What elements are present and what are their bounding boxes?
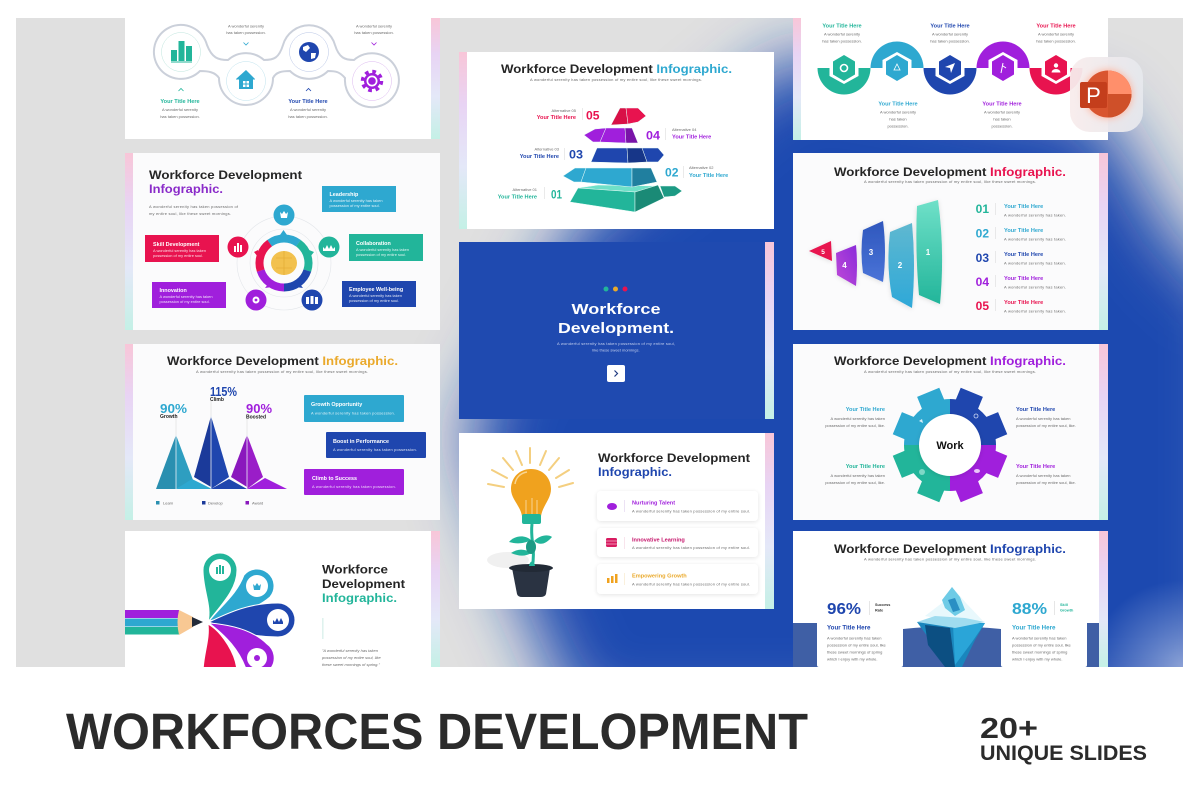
callout: Skill Development: Skill Development: [153, 242, 200, 248]
captions top: A wonderful serenity: [932, 32, 968, 36]
slide count: [980, 713, 1147, 765]
card: Empowering Growth: A wonderful serenity has taken possession of my entire soul.: [632, 582, 750, 586]
labels right: A wonderful serenity has taken: [1016, 416, 1070, 421]
quote: possession of my entire soul, like: [321, 655, 381, 660]
list: 01: [976, 202, 989, 216]
quote: "A wonderful serenity has taken: [322, 648, 379, 653]
captions bottom: Your Title Here: [878, 102, 918, 108]
slide: pyramid: [459, 52, 774, 229]
tier labels: Alternative 02: [689, 165, 714, 170]
captions top: Your Title Here: [930, 24, 970, 30]
list: Your Title Here: [1004, 252, 1043, 258]
labels left: Your Title Here: [846, 464, 885, 470]
stat card: 96%: which I enjoy with my whole.: [827, 656, 877, 662]
heading: [558, 301, 674, 337]
card: Nurturing Talent: A wonderful serenity has taken possession of my entire soul.: [632, 508, 750, 514]
callout: Employee Well-being: Employee Well-being: [349, 287, 403, 293]
tier labels: Alternative 05: [552, 108, 577, 113]
callout: Leadership: [322, 186, 396, 212]
diagram: rings and segments: [237, 216, 331, 310]
labels left: Your Title Here: [846, 407, 885, 413]
tier labels: 05: [586, 108, 600, 122]
list: Your Title Here: [1004, 228, 1043, 234]
heading: Development: [322, 577, 405, 591]
callout: Climb to Success: Climb to Success: [312, 476, 357, 482]
captions top: A wonderful serenity: [824, 32, 860, 36]
labels right: A wonderful serenity has taken: [1016, 473, 1070, 478]
legend: Learn: [163, 500, 173, 506]
labels right: [1016, 407, 1076, 485]
data labels: Climb: [210, 397, 224, 403]
captions bottom: has taken: [993, 116, 1011, 122]
list: 03: [976, 251, 989, 265]
stat card: 96%: Rate: [875, 608, 883, 612]
illustration: iceberg: [917, 587, 985, 667]
funnel numbers: 2: [898, 261, 903, 270]
captions top: has taken possession.: [822, 38, 862, 44]
subtitle: A wonderful serenity has taken possession of my entire soul, like these sweet mornings.: [864, 556, 1036, 562]
captions top: Your Title Here: [1036, 24, 1076, 30]
text block: intro: [149, 204, 239, 216]
subtitle: [557, 341, 675, 352]
tier labels: Your Title Here: [672, 134, 711, 140]
subtitle: A wonderful serenity has taken possession of my entire soul, like these sweet mornings.: [864, 369, 1036, 374]
heading: Workforce: [572, 301, 660, 318]
stat card: 88%: [1001, 592, 1087, 667]
icon nodes: [228, 204, 340, 310]
tier labels: Alternative 04: [672, 127, 697, 132]
data labels: 90%: [246, 401, 272, 416]
captions bottom: [878, 102, 1022, 128]
slide: peaks chart: [125, 344, 440, 520]
funnel numbers: 3: [869, 248, 874, 257]
text block: top captions: has taken possession.: [226, 30, 266, 35]
callout: Climb to Success: A wonderful serenity has taken possession.: [312, 484, 396, 489]
callout: Growth Opportunity: Growth Opportunity: [311, 402, 362, 408]
data labels: 115%: [210, 384, 237, 399]
dots: [604, 286, 628, 292]
captions top: [822, 24, 1076, 44]
hexagons: [830, 52, 1070, 84]
callout: Innovation: Innovation: [160, 288, 187, 294]
quote: [321, 648, 381, 667]
list: A wonderful serenity has taken.: [1004, 284, 1066, 290]
captions bottom: possession.: [887, 124, 909, 128]
callout: Boost in Performance: [326, 432, 426, 458]
illustration: bulb and plant: [487, 448, 573, 597]
card: Innovative Learning: Innovative Learning: [632, 538, 685, 544]
callout: Growth Opportunity: A wonderful serenity has taken possession.: [311, 410, 395, 416]
text block: top captions: A wonderful serenity: [228, 24, 264, 28]
card: Empowering Growth: Empowering Growth: [632, 574, 687, 580]
heading: Workforce Development: [149, 168, 302, 182]
icon: globe: [299, 42, 319, 62]
subtitle: A wonderful serenity has taken possession of my entire soul, like these sweet mornings.: [196, 369, 368, 374]
data labels: Boosted: [246, 414, 266, 420]
icon: pencil: [125, 610, 203, 635]
labels right: Your Title Here: [1016, 464, 1055, 470]
data labels: [160, 384, 272, 420]
stat card: 96%: 96%: [827, 601, 861, 618]
slide: blue cover: [459, 242, 774, 419]
callout: Employee Well-being: [342, 281, 416, 307]
funnel numbers: [821, 248, 931, 270]
text block: intro: my entire soul, like these sweet mornings.: [149, 211, 231, 216]
card: Empowering Growth: [597, 564, 758, 594]
callout: Collaboration: Collaboration: [356, 241, 391, 247]
text block: lower captions: A wonderful serenity: [162, 107, 198, 112]
callout: Collaboration: possession of my entire soul.: [356, 252, 406, 257]
stat card: 96%: Your Title Here: [827, 624, 871, 632]
slide count: 20+: [980, 713, 1038, 745]
slide count: UNIQUE SLIDES: [980, 742, 1147, 765]
icon: PowerPoint badge: P: [1086, 83, 1101, 108]
captions top: has taken possession.: [930, 38, 970, 44]
list: [976, 202, 1066, 314]
callout: Collaboration: [349, 234, 423, 261]
stat card: 96%: these sweet mornings of spring: [827, 650, 882, 654]
text block: lower captions: A wonderful serenity: [290, 107, 326, 112]
list: A wonderful serenity has taken.: [1004, 212, 1066, 218]
stat card: 88%: 88%: [1012, 601, 1047, 618]
labels left: A wonderful serenity has taken: [831, 416, 885, 421]
funnel numbers: 1: [926, 248, 931, 257]
labels left: A wonderful serenity has taken: [831, 473, 885, 478]
callout: Growth Opportunity: [304, 395, 404, 422]
card: Innovative Learning: [597, 528, 758, 557]
heading: Workforce Development: [598, 451, 750, 465]
tier labels: Alternative 01: [513, 187, 538, 192]
text block: lower captions: Your Title Here: [160, 99, 200, 105]
heading: Workforce Development Infographic.: [834, 165, 1066, 179]
callout: Leadership: possession of my entire soul.: [330, 203, 380, 208]
callout: Boost in Performance: A wonderful serenity has taken possession.: [333, 447, 417, 452]
icon: bar chart: [171, 41, 192, 62]
callout: Leadership: A wonderful serenity has taken: [330, 198, 382, 203]
chart: funnel blocks: [809, 200, 942, 308]
chart: gear: [890, 385, 1010, 505]
heading: Infographic.: [322, 591, 397, 605]
stat card: 96%: [817, 592, 903, 667]
list: 05: [976, 299, 989, 313]
gear centre label: Work: [936, 440, 965, 452]
heading: Workforce Development Infographic.: [834, 354, 1066, 368]
list: Your Title Here: [1004, 276, 1043, 282]
legend: [156, 500, 263, 506]
captions bottom: A wonderful serenity: [984, 110, 1020, 114]
stat card: 96%: A wonderful serenity has taken: [827, 636, 881, 640]
list: 04: [976, 275, 989, 289]
heading: Infographic.: [149, 182, 223, 196]
subtitle: like these sweet mornings.: [592, 348, 640, 352]
labels left: possession of my entire soul, like.: [825, 480, 885, 485]
callout: Skill Development: [145, 235, 219, 262]
slide: gear: [793, 344, 1108, 520]
list: A wonderful serenity has taken.: [1004, 260, 1066, 266]
callout: Innovation: A wonderful serenity has taken: [160, 294, 212, 299]
heading: Infographic.: [598, 465, 672, 479]
stat card: 88%: A wonderful serenity has taken: [1012, 636, 1066, 640]
stat card: 88%: possession of my entire soul, like: [1012, 642, 1071, 648]
heading: [322, 562, 405, 605]
list: A wonderful serenity has taken.: [1004, 308, 1066, 314]
half discs: [818, 41, 1082, 94]
subtitle: A wonderful serenity has taken possession of my entire soul,: [557, 341, 675, 346]
serpentine track: [154, 25, 399, 107]
tier labels: Your Title Here: [498, 194, 537, 200]
text block: lower captions: has taken possession.: [288, 114, 328, 119]
text block: intro: A wonderful serenity has taken possession of: [149, 204, 239, 209]
callout: Employee Well-being: A wonderful serenity has taken: [349, 293, 402, 298]
button: [607, 365, 625, 382]
icon: house: [236, 70, 255, 89]
slide: radial brain: [125, 153, 440, 330]
text block: lower captions: Your Title Here: [288, 99, 328, 105]
callout: Skill Development: possession of my entire soul.: [153, 253, 203, 258]
tier labels: 01: [551, 188, 562, 202]
labels left: [825, 407, 885, 485]
callout: Leadership: Leadership: [330, 192, 359, 198]
text block: top captions: A wonderful serenity: [356, 24, 392, 28]
callout: Skill Development: A wonderful serenity has taken: [153, 248, 206, 253]
captions top: has taken possession.: [1036, 38, 1076, 44]
petals: [204, 554, 294, 667]
labels right: possession of my entire soul, like.: [1016, 423, 1076, 428]
funnel numbers: 5: [821, 249, 825, 256]
text block: lower captions: [160, 88, 328, 119]
callout: Boost in Performance: Boost in Performance: [333, 439, 389, 445]
heading: Development.: [558, 320, 674, 337]
slide: light bulb plant: [459, 433, 774, 609]
heading: Workforce Development Infographic.: [167, 354, 398, 368]
heading: [598, 451, 750, 479]
callout: Innovation: [152, 282, 226, 308]
quote: these sweet mornings of spring.": [322, 662, 380, 667]
subtitle: A wonderful serenity has taken possession of my entire soul, like these sweet mornings.: [530, 77, 702, 82]
stat card: 88%: which I enjoy with my whole.: [1012, 656, 1062, 662]
slide: funnel list: [793, 153, 1108, 330]
slide: pencil petals: [125, 531, 440, 667]
main title: WORKFORCES DEVELOPMENT: [66, 703, 808, 760]
icon: PowerPoint badge: [1070, 57, 1143, 132]
subtitle: A wonderful serenity has taken possession of my entire soul, like these sweet mornings.: [864, 179, 1036, 184]
list: 02: [976, 226, 989, 240]
heading: Workforce Development Infographic.: [501, 62, 732, 76]
icon: brain: [271, 251, 297, 275]
card: Innovative Learning: A wonderful serenity has taken possession of my entire soul.: [632, 545, 750, 550]
chart: triangular peaks: [156, 400, 287, 489]
labels right: Your Title Here: [1016, 407, 1055, 413]
tier labels: Your Title Here: [537, 115, 576, 121]
list: A wonderful serenity has taken.: [1004, 236, 1066, 242]
stat card: 88%: Your Title Here: [1012, 624, 1056, 632]
legend: Develop: [208, 500, 223, 506]
callout: Innovation: possession of my entire soul.: [160, 299, 210, 304]
stat card: 96%: possession of my entire soul, like: [827, 642, 886, 648]
text block: top captions: has taken possession.: [354, 30, 394, 35]
tier labels: Alternative 03: [535, 146, 560, 152]
card: Nurturing Talent: Nurturing Talent: [632, 500, 675, 506]
stat card: 88%: these sweet mornings of spring: [1012, 650, 1067, 654]
captions top: A wonderful serenity: [1038, 32, 1074, 36]
tier labels: [498, 108, 728, 202]
captions top: Your Title Here: [822, 24, 862, 30]
data labels: 90%: [160, 401, 187, 416]
legend: Award: [252, 500, 263, 506]
funnel numbers: 4: [842, 261, 847, 270]
heading: Workforce Development Infographic.: [834, 542, 1066, 556]
captions bottom: has taken: [889, 116, 907, 122]
captions bottom: A wonderful serenity: [880, 110, 916, 114]
stat card: 96%: Success: [875, 603, 890, 607]
slide: hexagon wave: [793, 18, 1108, 140]
tier labels: Your Title Here: [520, 154, 559, 160]
heading: Workforce: [322, 562, 388, 576]
tier labels: Your Title Here: [689, 173, 728, 179]
text block: lower captions: has taken possession.: [160, 114, 200, 119]
labels left: possession of my entire soul, like.: [825, 423, 885, 428]
list: Your Title Here: [1004, 300, 1043, 306]
slide: serpentine path: [125, 18, 440, 139]
heading: [149, 168, 302, 196]
petal icons: [209, 559, 289, 668]
tier labels: 03: [569, 148, 583, 162]
card: Nurturing Talent: [597, 491, 758, 521]
tier labels: 04: [646, 128, 660, 142]
divider: [322, 618, 324, 639]
callout: Collaboration: A wonderful serenity has taken: [356, 247, 409, 252]
text block: top captions: [226, 24, 394, 45]
captions bottom: Your Title Here: [982, 102, 1022, 108]
chart: pyramid: [563, 108, 682, 212]
icon: gear: [362, 72, 382, 90]
labels right: possession of my entire soul, like.: [1016, 480, 1076, 485]
callout: Employee Well-being: possession of my entire soul.: [349, 298, 399, 303]
tier labels: 02: [665, 166, 679, 180]
stat card: 88%: Skill: [1060, 603, 1068, 607]
list: Your Title Here: [1004, 204, 1043, 210]
callout: Climb to Success: [304, 469, 404, 495]
stat card: 88%: Growth: [1060, 608, 1074, 612]
slide: iceberg: [793, 531, 1108, 667]
captions bottom: possession.: [991, 124, 1013, 128]
data labels: Growth: [160, 414, 178, 420]
